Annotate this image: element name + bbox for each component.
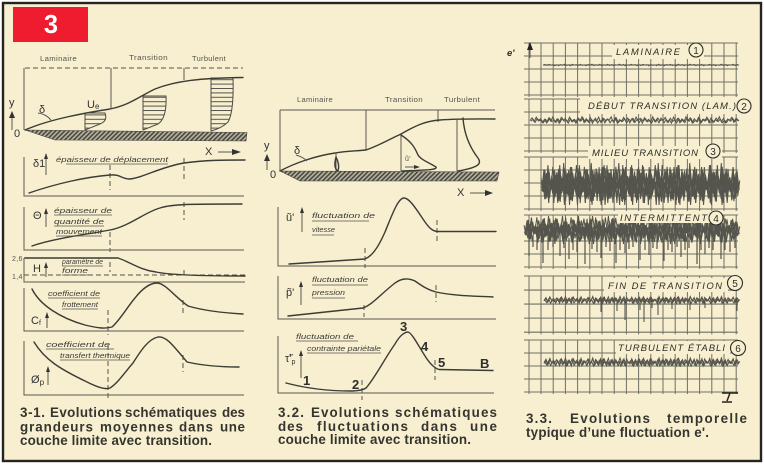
chart: momentum thickness <box>24 202 244 252</box>
caption 3.2: Evolutions <box>311 405 389 420</box>
chart: wall stress fluctuation: 5 <box>438 355 445 370</box>
chart: shape parameter H: 2,6 <box>12 256 23 263</box>
chart: displacement thickness <box>24 153 245 196</box>
trace 1 laminaire: LAMINAIRE <box>616 47 681 58</box>
boundary layer diagram 2 <box>264 97 499 199</box>
chart: pressure fluctuation <box>278 275 496 319</box>
boundary layer diagram 1 <box>9 55 247 158</box>
chart: shape parameter H: H <box>33 263 41 275</box>
chart: momentum thickness: épaisseur de <box>54 206 112 215</box>
chart: wall stress fluctuation: 1 <box>303 373 310 388</box>
caption 3.2: couche limite avec transition. <box>278 432 471 447</box>
chart: friction coefficient Cf: f <box>39 320 41 327</box>
trace 4 intermittent: INTERMITTENT <box>620 213 708 224</box>
chart: wall stress fluctuation: fluctuation de <box>296 332 354 341</box>
chart: momentum thickness: mouvement <box>56 227 103 236</box>
boundary layer diagram 2: y <box>264 140 270 152</box>
caption 3.2: dans <box>421 419 457 434</box>
chart: wall stress fluctuation <box>278 319 494 400</box>
caption 3-1: Evolutions <box>50 405 122 420</box>
boundary layer diagram 2: 0 <box>270 169 276 181</box>
chart: thermal transfer coefficient: transfert thermique <box>60 351 130 360</box>
caption 3.2: une <box>470 419 497 434</box>
caption 3.3: 3.3. <box>526 411 552 426</box>
chart: pressure fluctuation: fluctuation de <box>312 275 368 284</box>
chart: velocity fluctuation: ũ' <box>286 212 294 224</box>
section number badge <box>13 7 88 42</box>
caption 3.2: 3.2. <box>278 405 304 420</box>
boundary layer diagram 2: Transition <box>385 97 423 104</box>
panel: 3.2 fluctuations <box>264 97 499 400</box>
chart: wall stress fluctuation: 4 <box>421 339 429 354</box>
chart: thermal transfer coefficient: coefficient de <box>46 340 110 349</box>
chart: friction coefficient Cf: coefficient de <box>48 289 100 298</box>
trace 1 laminaire <box>507 42 739 97</box>
boundary layer diagram 1: δ <box>39 104 45 116</box>
chart: velocity fluctuation <box>278 198 496 268</box>
panel: 3-1 mean quantities <box>9 55 247 400</box>
chart: wall stress fluctuation: contrainte pariétale <box>307 344 381 353</box>
trace 5 fin de transition: FIN DE TRANSITION <box>608 281 722 292</box>
section number badge: 3 <box>44 11 58 39</box>
chart: momentum thickness: quantité de <box>54 217 104 226</box>
chart: pressure fluctuation: p̃' <box>286 287 294 299</box>
caption 3.3: typique d’une fluctuation e'. <box>526 425 709 440</box>
chart: friction coefficient Cf: frottement <box>62 300 99 309</box>
chart: friction coefficient Cf <box>24 283 244 335</box>
chart: velocity fluctuation: vitesse <box>312 225 335 234</box>
trace 2 debut transition: DÉBUT TRANSITION (LAM.) <box>588 101 736 112</box>
caption 3.3: temporelle <box>667 411 747 426</box>
boundary layer diagram 1: e <box>95 102 100 111</box>
trace 3 milieu transition: MILIEU TRANSITION <box>592 148 698 159</box>
boundary layer diagram 1: Transition <box>129 55 168 62</box>
trace 2 debut transition <box>524 98 752 153</box>
trace 6 turbulent etabli: TURBULENT ÉTABLI <box>618 343 725 354</box>
trace 1 laminaire: e' <box>507 48 515 59</box>
caption 3.2: fluctuations <box>317 419 408 434</box>
caption 3.3: Evolutions <box>570 411 650 426</box>
chart: shape parameter H: paramètre de <box>61 257 103 266</box>
chart: momentum thickness: Θ <box>33 210 42 222</box>
chart: shape parameter H: forme <box>62 266 88 275</box>
caption 3-1: schématiques <box>125 405 217 420</box>
trace 4 intermittent <box>524 211 740 269</box>
boundary layer diagram 1: 0 <box>14 128 20 140</box>
chart: wall stress fluctuation: 3 <box>400 319 407 334</box>
caption 3-1: moyennes <box>100 420 173 434</box>
caption 3-1: couche limite avec transition. <box>20 433 212 448</box>
boundary layer diagram 2: X <box>457 187 465 199</box>
caption 3-1: grandeurs <box>20 420 93 434</box>
caption 3-1: 3-1. <box>20 405 45 420</box>
boundary layer diagram 1: Turbulent <box>192 56 226 63</box>
boundary layer diagram 1: X <box>205 146 213 158</box>
chart: wall stress fluctuation: p <box>291 359 295 366</box>
chart: wall stress fluctuation: B <box>480 356 489 371</box>
boundary layer diagram 1: U <box>87 99 95 111</box>
trace 6 turbulent etabli <box>524 340 746 394</box>
chart: shape parameter H <box>12 256 245 282</box>
caption 3.2 <box>278 405 497 447</box>
trace 1 laminaire: 1 <box>693 46 699 57</box>
trace 6 turbulent etabli: 6 <box>735 344 741 355</box>
chart: displacement thickness: épaisseur de déplacement <box>56 155 169 164</box>
caption 3.2: des <box>278 419 303 434</box>
boundary layer diagram 2: Turbulent <box>444 97 480 104</box>
chart: wall stress fluctuation: 2 <box>352 377 359 392</box>
boundary layer diagram 1: y <box>9 97 15 109</box>
chart: pressure fluctuation: pression <box>311 288 345 297</box>
chart: shape parameter H: 1,4 <box>12 274 23 281</box>
boundary layer diagram 2: δ <box>294 145 300 157</box>
caption 3-1: une <box>220 420 245 434</box>
caption 3-1: des <box>222 405 245 420</box>
caption 3.3 <box>526 411 747 440</box>
caption 3-1: dans <box>179 420 213 434</box>
chart: wall stress fluctuation: τ̃' <box>285 353 291 365</box>
trace 3 milieu transition: 3 <box>710 147 716 158</box>
chart: friction coefficient Cf: C <box>31 315 39 327</box>
trace 5 fin de transition: 5 <box>732 279 738 290</box>
caption 3-1 <box>20 405 245 448</box>
chart: velocity fluctuation: fluctuation de <box>312 211 375 220</box>
chart: thermal transfer coefficient: p <box>40 378 45 387</box>
trace 5 fin de transition <box>524 276 742 334</box>
chart: thermal transfer coefficient <box>24 337 244 400</box>
time scale marker <box>722 393 738 402</box>
boundary layer diagram 2: ũ' <box>405 156 411 163</box>
boundary layer diagram 2: Laminaire <box>297 97 333 104</box>
chart: displacement thickness: δ1 <box>33 158 45 170</box>
trace 3 milieu transition <box>524 144 740 211</box>
boundary layer diagram 1: Laminaire <box>40 56 77 63</box>
trace 2 debut transition: 2 <box>741 102 747 113</box>
caption 3.2: schématiques <box>395 405 497 420</box>
chart: thermal transfer coefficient: Ø <box>31 374 40 386</box>
panel: 3.3 time traces <box>507 42 752 402</box>
trace 4 intermittent: 4 <box>713 214 719 225</box>
